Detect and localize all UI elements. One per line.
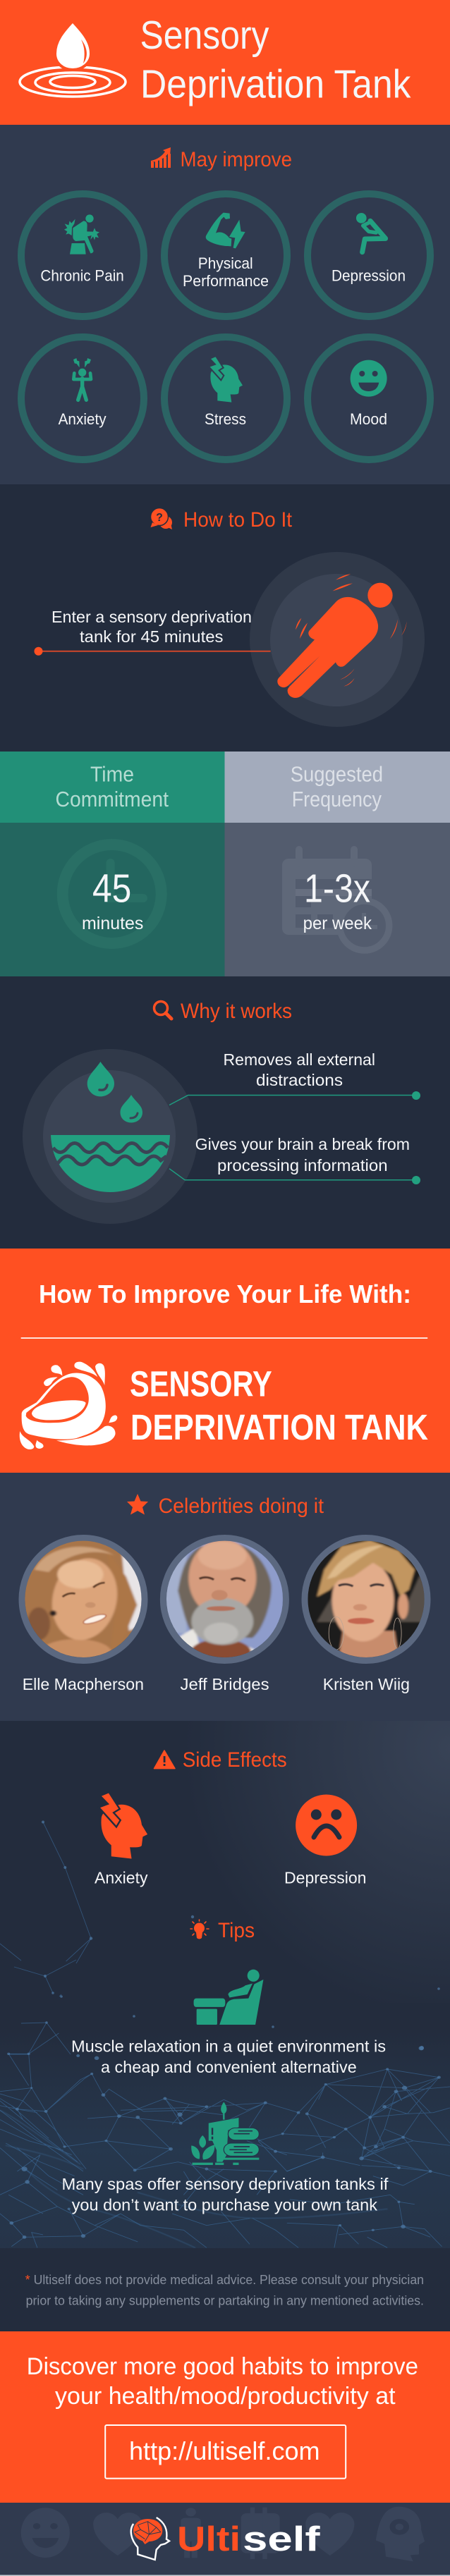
stat: 45 minutes bbox=[82, 866, 143, 933]
callout: gives your brain a break: Gives your brain a break from bbox=[195, 1135, 410, 1153]
item: physical performance: Physical bbox=[198, 254, 253, 272]
heading: side effects: Side Effects bbox=[183, 1748, 287, 1772]
icon: candle, leaves and towels bbox=[191, 2102, 259, 2165]
tip: spas: you don’t want to purchase your own tank bbox=[72, 2196, 377, 2214]
item: stress bbox=[164, 337, 287, 460]
icon: float tank with splashes bbox=[20, 1362, 117, 1449]
logo: ultiself bbox=[131, 2517, 320, 2560]
heading: suggested frequency: Frequency bbox=[292, 787, 382, 811]
icon: recliner bbox=[194, 1970, 263, 2025]
icon: calendar and clock bbox=[282, 846, 392, 953]
heading: time commitment: Time bbox=[90, 762, 134, 787]
call to action text bbox=[27, 2353, 418, 2410]
illustration: floating person bbox=[250, 552, 425, 727]
panel: time commitment bbox=[0, 752, 224, 976]
side effect: anxiety: Anxiety bbox=[95, 1868, 148, 1887]
heading: celebrities doing it: Celebrities doing it bbox=[159, 1495, 324, 1518]
url button bbox=[105, 2425, 346, 2479]
heading: may improve: May improve bbox=[181, 148, 292, 171]
tip: spas bbox=[62, 2102, 389, 2214]
network background bbox=[0, 1820, 450, 2247]
side effect: anxiety bbox=[95, 1792, 148, 1887]
icon: smiley bbox=[351, 360, 387, 397]
panel: header bbox=[0, 0, 450, 125]
heading: time commitment: Commitment bbox=[55, 787, 169, 811]
item: depression: Depression bbox=[332, 267, 406, 285]
panel: footer bbox=[0, 2503, 450, 2576]
icon: sad face bbox=[296, 1795, 357, 1856]
callout: gives your brain a break: processing information bbox=[217, 1156, 388, 1174]
banner title: SENSORY bbox=[130, 1363, 272, 1404]
stat: 1-3x per week: 1-3x bbox=[304, 866, 370, 911]
celebrity names: Elle Macpherson bbox=[23, 1675, 144, 1693]
panel: suggested frequency bbox=[224, 752, 450, 976]
icon: flexed arm and bolt bbox=[206, 213, 245, 248]
banner heading: How To Improve Your Life With: bbox=[39, 1280, 411, 1308]
icon: head with lightning bolt bbox=[99, 1792, 147, 1859]
call to action text: your health/mood/productivity at bbox=[55, 2383, 396, 2410]
callout: enter a sensory deprivation tank: Enter a sensory deprivation bbox=[51, 608, 252, 626]
stat: 1-3x per week: per week bbox=[303, 914, 372, 933]
item: mood: Mood bbox=[350, 410, 387, 428]
disclaimer: * Ultiself does not provide medical advice. Please consult your physician bbox=[25, 2273, 424, 2287]
item: anxiety bbox=[21, 337, 144, 460]
disclaimer: prior to taking any supplements or partaking in any mentioned activities. bbox=[26, 2293, 424, 2307]
logo: ultiself: self bbox=[243, 2520, 320, 2558]
celebrity names: Kristen Wiig bbox=[323, 1675, 410, 1693]
faint background icons bbox=[21, 2507, 425, 2561]
icon: clock bbox=[63, 845, 162, 943]
item: physical performance bbox=[164, 194, 287, 317]
icon: hunched figure bbox=[356, 213, 386, 252]
photo: jeff bridges bbox=[163, 1538, 286, 1665]
item: mood bbox=[308, 337, 430, 460]
title: Sensory bbox=[140, 13, 269, 58]
side effect: depression: Depression bbox=[284, 1868, 367, 1887]
callout: enter a sensory deprivation tank bbox=[34, 608, 271, 656]
photo: elle macpherson bbox=[22, 1538, 145, 1667]
tip: muscle relaxation bbox=[71, 1970, 386, 2076]
panel: how to improve banner bbox=[0, 1249, 450, 1473]
icon: chronic pain bbox=[64, 214, 99, 254]
heading: why it works: Why it works bbox=[181, 1000, 292, 1023]
banner title bbox=[130, 1363, 428, 1447]
logo: ultiself: Ulti bbox=[177, 2520, 241, 2558]
heading: tips: Tips bbox=[218, 1919, 255, 1942]
network strands bbox=[0, 2110, 387, 2247]
side effect: depression bbox=[284, 1795, 367, 1887]
url button: http://ultiself.com bbox=[129, 2436, 320, 2465]
panel: why it works bbox=[0, 976, 450, 1249]
heading: suggested frequency: Suggested bbox=[291, 762, 383, 787]
item: chronic pain: Chronic Pain bbox=[40, 267, 124, 285]
icon: water drop with ripples bbox=[20, 21, 126, 97]
tip: muscle relaxation: Muscle relaxation in a quiet environment is bbox=[71, 2037, 386, 2056]
callout: removes all external distractions bbox=[169, 1050, 420, 1105]
photo: kristen wiig bbox=[304, 1538, 427, 1661]
item: physical performance: Performance bbox=[183, 272, 269, 290]
panel: celebrities bbox=[0, 1473, 450, 1721]
panel: call to action bbox=[0, 2331, 450, 2503]
panel: side effects and tips background bbox=[0, 1721, 450, 2331]
panel: may improve bbox=[0, 125, 450, 484]
call to action text: Discover more good habits to improve bbox=[27, 2353, 418, 2380]
callout: removes all external distractions: Removes all external bbox=[223, 1050, 375, 1069]
tip: muscle relaxation: a cheap and convenient alternative bbox=[101, 2058, 357, 2076]
heading: suggested frequency bbox=[291, 762, 383, 811]
celebrity names: Jeff Bridges bbox=[181, 1675, 269, 1693]
panel: how to do it bbox=[0, 484, 450, 752]
stat: 45 minutes: 45 bbox=[92, 866, 131, 911]
icon: head with bolt bbox=[209, 356, 243, 403]
stat: 45 minutes: minutes bbox=[82, 914, 143, 933]
heading: how to do it: How to Do It bbox=[183, 508, 293, 532]
callout: gives your brain a break bbox=[169, 1135, 420, 1184]
item: chronic pain bbox=[21, 194, 144, 317]
tip: spas: Many spas offer sensory deprivation tanks if bbox=[62, 2175, 389, 2193]
title bbox=[140, 13, 411, 106]
icon: anxious figure bbox=[73, 358, 91, 400]
illustration: drops over water bbox=[23, 1049, 197, 1224]
heading: time commitment bbox=[55, 762, 169, 811]
title: Deprivation Tank bbox=[140, 61, 411, 106]
celebrity names bbox=[23, 1675, 410, 1693]
item: anxiety: Anxiety bbox=[59, 410, 107, 428]
heading: tips bbox=[190, 1919, 255, 1942]
item: depression bbox=[308, 194, 430, 317]
disclaimer bbox=[25, 2273, 424, 2307]
heading: how to do it: ? bbox=[156, 512, 163, 524]
stat: 1-3x per week bbox=[303, 866, 372, 933]
callout: removes all external distractions: distractions bbox=[256, 1071, 343, 1089]
callout: enter a sensory deprivation tank: tank for 45 minutes bbox=[80, 627, 223, 646]
item: stress: Stress bbox=[205, 410, 246, 428]
